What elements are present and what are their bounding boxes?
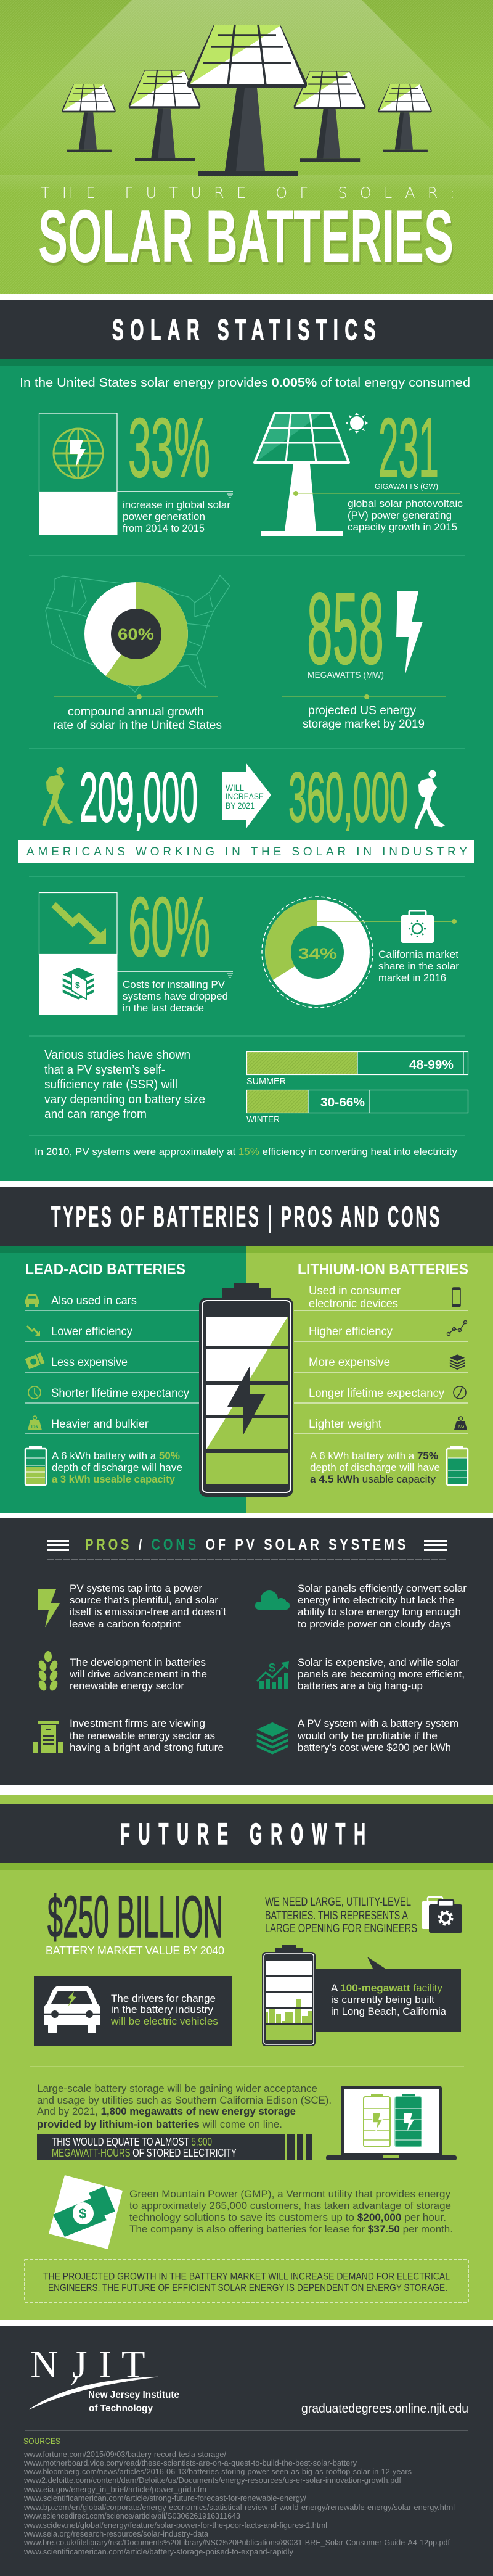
sources: www.bre.co.uk/filelibrary/nsc/Documents%20Library/NSC%20Publications/88031-BRE_Solar-Consumer-Guide-A4-12pp.pdf <box>23 2538 450 2547</box>
callout: long beach facility: A 100-megawatt facility <box>331 1982 443 1994</box>
stat: 858 megawatts <box>282 572 446 731</box>
icon: clock <box>454 1386 466 1399</box>
banner <box>18 840 474 863</box>
icon: falling arrow box: $ <box>75 980 80 990</box>
sources: www.scientificamerican.com/article/strong-future-forecast-for-renewable-energy/ <box>23 2493 306 2503</box>
text: depth of discharge will have <box>310 1462 440 1473</box>
sources <box>23 2436 455 2556</box>
stat: 33 percent <box>39 401 233 535</box>
con: storage: ability to store energy long enough <box>298 1606 461 1618</box>
pro: investment: the renewable energy sector as <box>70 1730 215 1742</box>
text: green mountain power: to approximately 265,000 customers, has taken advantage of storage <box>129 2200 451 2212</box>
stat: california market share <box>262 897 459 1008</box>
text: California market <box>378 949 458 960</box>
text <box>123 979 228 1014</box>
stat: 60 percent growth map donut <box>46 575 230 732</box>
pro: development: renewable energy sector <box>70 1680 184 1692</box>
pro: investment: Investment firms are viewing <box>70 1718 205 1729</box>
callout: long beach facility: is currently being built <box>331 1994 434 2006</box>
text <box>53 706 222 732</box>
text: engineers opening: BATTERIES. THIS REPRESENTS A <box>265 1909 408 1922</box>
con: expensive: batteries are a big hang-up <box>298 1680 423 1692</box>
icon: falling arrow box <box>39 893 117 1015</box>
chart: donut: 34% <box>298 945 337 963</box>
arrow <box>222 763 271 829</box>
icon: car <box>25 1295 39 1307</box>
icon: solar panel <box>255 413 349 536</box>
text: (PV) power generating <box>348 509 452 521</box>
text: engineers opening: WE NEED LARGE, UTILITY-LEVEL <box>265 1896 411 1909</box>
icon: sun <box>346 413 368 434</box>
con: expensive: panels are becoming more efficient, <box>298 1668 465 1680</box>
text: depth of discharge will have <box>52 1462 182 1473</box>
callout: conclusion <box>25 2260 468 2302</box>
icon: wheat <box>37 1651 59 1692</box>
text: efficiency note: In 2010, PV systems were approximately at 15% efficiency in converting heat into electricity <box>35 1146 457 1158</box>
text: large-scale storage: and usage by utilities such as Southern California Edison (SCE). <box>37 2094 332 2106</box>
sources: www.scientificamerican.com/article/battery-storage-poised-to-expand-rapidly <box>23 2547 293 2556</box>
list: Used in consumer <box>309 1285 401 1298</box>
stat: 250 billion: BATTERY MARKET VALUE BY 2040 <box>46 1944 224 1957</box>
list: Heavier and bulkier <box>51 1418 149 1431</box>
icon: bolt <box>38 1589 60 1627</box>
con: expensive: Solar is expensive, and while solar <box>298 1656 459 1668</box>
icon: car <box>44 1986 100 2033</box>
pro: emission free: itself is emission-free and doesn’t <box>70 1606 226 1618</box>
icon: weight <box>28 1416 42 1430</box>
con: expensive <box>257 1656 465 1692</box>
text: capacity growth in 2015 <box>348 521 457 533</box>
panel: lead-acid batteries <box>25 1261 199 1485</box>
pro: development: The development in batteries <box>70 1656 206 1668</box>
list: Less expensive <box>51 1356 128 1369</box>
icon: weight: KG <box>458 1425 465 1429</box>
text: projected US energy <box>308 704 416 717</box>
stat: 60 percent cost drop <box>39 880 233 1015</box>
chart: summer bar: SUMMER <box>246 1076 286 1087</box>
list: electronic devices <box>309 1298 398 1311</box>
pro: investment: having a bright and strong future <box>70 1742 224 1753</box>
pro: emission free: leave a carbon footprint <box>70 1618 181 1630</box>
text: engineers opening <box>265 1896 417 1935</box>
icon: money <box>49 2175 123 2249</box>
text: large-scale storage: provided by lithium-ion batteries will come on line. <box>37 2118 282 2130</box>
text: self sufficiency rate: sufficiency rate (SSR) will <box>44 1078 177 1092</box>
chart: summer bar <box>246 1051 468 1087</box>
list: Shorter lifetime expectancy <box>51 1387 189 1400</box>
icon: bolt <box>396 591 423 675</box>
text: A 6 kWh battery with a 75% <box>310 1450 438 1462</box>
callout: electric vehicles: in the battery industry <box>111 2004 214 2015</box>
text: self sufficiency rate: and can range from <box>44 1108 147 1121</box>
text: storage market by 2019 <box>303 718 425 731</box>
pro: emission free: source that’s plentiful, and solar <box>70 1594 218 1606</box>
pro: emission free <box>38 1582 226 1630</box>
logo: njit: of Technology <box>89 2403 153 2414</box>
list: Higher efficiency <box>309 1325 393 1338</box>
icon: cloud <box>255 1590 290 1610</box>
con: profitability <box>257 1718 458 1755</box>
icon: weight <box>454 1417 467 1430</box>
icon: briefcases with gear <box>422 1897 462 1933</box>
illustration: central battery <box>199 1283 293 1497</box>
stat: 60 percent cost drop: 60% <box>128 880 210 974</box>
text: a 4.5 kWh usable capacity <box>310 1473 436 1485</box>
icon: money stack <box>257 1722 288 1755</box>
icon: building <box>33 1721 63 1753</box>
icon: cash <box>25 1352 44 1369</box>
teal battery <box>395 2094 422 2147</box>
chart: summer bar: 48-99% <box>409 1058 454 1072</box>
logo: njit: NJIT <box>30 2343 145 2386</box>
website url: graduatedegrees.online.njit.edu <box>301 2402 468 2416</box>
icon: laptop with batteries <box>326 2086 457 2160</box>
hero background <box>0 0 493 294</box>
icon: stack <box>450 1354 465 1370</box>
icon: briefcase with sun <box>401 911 434 943</box>
text: self sufficiency rate: vary depending on battery size <box>44 1093 205 1106</box>
text: in the last decade <box>123 1002 204 1014</box>
con: storage <box>255 1582 467 1630</box>
text: rate of solar in the United States <box>53 719 222 732</box>
stat: 858 megawatts: MEGAWATTS (MW) <box>308 670 384 680</box>
sources: www.eia.gov/energy_in_brief/article/power_grid.cfm <box>23 2485 206 2494</box>
list: Longer lifetime expectancy <box>309 1387 444 1400</box>
stat: 231 gigawatts: GIGAWATTS (GW) <box>375 482 438 491</box>
con: profitability: would only be profitable if the <box>297 1730 438 1742</box>
logo: njit: New Jersey Institute <box>88 2390 179 2400</box>
stat: 231 gigawatts <box>255 401 463 536</box>
con: storage: Solar panels efficiently convert solar <box>298 1582 467 1594</box>
arrow: INCREASE <box>226 791 264 801</box>
icon: walker white <box>414 770 445 829</box>
con: storage: to provide power on cloudy days <box>298 1618 451 1630</box>
arrow: BY 2021 <box>226 800 255 810</box>
list <box>51 1294 189 1431</box>
list: Lighter weight <box>309 1418 382 1431</box>
callout: long beach facility: in Long Beach, California <box>331 2006 447 2017</box>
callout: electric vehicles: will be electric vehicles <box>110 2015 218 2027</box>
text <box>123 499 230 534</box>
text: green mountain power: Green Mountain Power (GMP), a Vermont utility that provides energy <box>129 2188 451 2200</box>
icon: graph <box>447 1321 467 1336</box>
text <box>310 1450 440 1485</box>
sources: www.seia.org/research-resources/solar-industry-data <box>23 2529 209 2538</box>
green battery <box>364 2094 390 2147</box>
panel: lead-acid batteries: LEAD-ACID BATTERIES <box>25 1261 185 1278</box>
text: $250 BILLION <box>47 1884 223 1950</box>
text: global solar photovoltaic <box>348 498 463 509</box>
stat: solar workers <box>18 759 474 863</box>
icon: clock <box>28 1386 41 1399</box>
icon: small battery 50 <box>25 1446 46 1485</box>
text: green mountain power: technology solutions to save its customers up to $200,000 per hour. <box>129 2212 446 2223</box>
banner: stored electricity: MEGAWATT-HOURS OF STORED ELECTRICITY <box>52 2147 237 2159</box>
text: a 3 kWh useable capacity <box>52 1473 176 1485</box>
subtitle: THE FUTURE OF SOLAR: <box>41 184 455 202</box>
icon: small battery 75 <box>447 1446 468 1485</box>
solar panels illustration <box>62 25 432 176</box>
heading: pros and cons of pv solar systems: PROS / CONS OF PV SOLAR SYSTEMS <box>85 1536 409 1553</box>
text: large-scale storage: Large-scale battery storage will be gaining wider acceptance <box>37 2083 317 2094</box>
text <box>378 949 459 984</box>
list: Lower efficiency <box>51 1325 132 1338</box>
icon: city battery <box>262 1945 316 2046</box>
text: large-scale storage: And by 2021, 1,800 megawatts of new energy storage <box>37 2105 296 2117</box>
list: More expensive <box>309 1356 390 1369</box>
text: A 6 kWh battery with a 50% <box>52 1450 180 1462</box>
sources: www.sciencedirect.com/science/article/pii/S0306261916311643 <box>23 2511 240 2520</box>
sources: www.fortune.com/2015/09/03/battery-record-tesla-storage/ <box>23 2450 226 2459</box>
con: storage: energy into electricity but lack the <box>298 1594 454 1606</box>
sources: www2.deloitte.com/content/dam/Deloitte/us/Documents/energy-resources/us-er-solar-innovation-growth.pdf <box>23 2475 401 2485</box>
text: Costs for installing PV <box>123 979 226 990</box>
arrow: WILL <box>226 783 244 792</box>
text <box>303 704 425 731</box>
pro: development <box>37 1651 207 1692</box>
panel: lithium-ion batteries: LITHIUM-ION BATTERIES <box>298 1261 468 1278</box>
chart: donut: 60% <box>118 626 154 643</box>
pro: development: will drive advancement in the <box>69 1668 207 1680</box>
icon: growth chart <box>257 1661 289 1689</box>
text: engineers opening: LARGE OPENING FOR ENGINEERS <box>265 1922 417 1935</box>
text: large-scale storage <box>37 2083 332 2130</box>
chart: winter bar: WINTER <box>246 1114 280 1125</box>
intro sentence: In the United States solar energy provides 0.005% of total energy consumed <box>20 376 470 390</box>
icon: money: $ <box>79 2206 86 2221</box>
logo: njit <box>29 2343 179 2414</box>
sources: www.motherboard.vice.com/read/these-scientists-are-on-a-quest-to-build-the-best-solar-battery <box>23 2458 357 2467</box>
text: share in the solar <box>378 960 459 972</box>
con: profitability: A PV system with a battery system <box>298 1718 458 1729</box>
stat: 250 billion <box>46 1884 224 1957</box>
text: increase in global solar <box>123 499 230 511</box>
text: market in 2016 <box>378 972 446 984</box>
list <box>309 1285 444 1431</box>
sources: www.bloomberg.com/news/articles/2016-06-13/batteries-storing-power-seen-as-big-as-rooftop-solar-in-12-years <box>23 2467 412 2476</box>
sources: www.bp.com/en/global/corporate/energy-economics/statistical-review-of-world-energy/renewable-energy/solar-energy.html <box>23 2503 455 2512</box>
chart: winter bar: 30-66% <box>320 1096 365 1109</box>
text <box>52 1450 182 1485</box>
text: systems have dropped <box>123 990 228 1002</box>
heading: pros and cons of pv solar systems <box>47 1536 447 1560</box>
stat: solar workers: 209,000 <box>79 759 198 837</box>
icon: phone <box>452 1288 460 1307</box>
banner: AMERICANS WORKING IN THE SOLAR IN INDUSTRY <box>26 846 467 858</box>
panel: lithium-ion batteries <box>294 1261 468 1485</box>
icon: globe box <box>39 413 117 535</box>
text <box>348 498 463 533</box>
pro: investment <box>33 1718 224 1753</box>
stat: 858 megawatts: 858 <box>307 572 384 685</box>
sources: www.scidev.net/global/energy/feature/solar-power-for-the-poor-facts-and-figures-1.html <box>23 2520 327 2530</box>
icon: down arrow <box>27 1326 40 1336</box>
callout: electric vehicles: The drivers for change <box>111 1993 216 2004</box>
text: green mountain power <box>129 2188 453 2235</box>
icon: weight: lbs <box>31 1424 38 1430</box>
con: profitability: battery’s cost were $200 per kWh <box>298 1742 451 1753</box>
sources: SOURCES <box>23 2436 60 2446</box>
title <box>38 184 455 281</box>
pro: emission free: PV systems tap into a power <box>70 1582 202 1594</box>
banner: stored electricity: THIS WOULD EQUATE TO ALMOST 5,900 <box>52 2136 212 2148</box>
banner: stored electricity <box>37 2134 312 2160</box>
text: power generation <box>123 511 205 522</box>
list: Also used in cars <box>51 1294 137 1307</box>
callout: electric vehicles <box>34 1976 232 2046</box>
text: self sufficiency rate <box>44 1048 205 1121</box>
text: self sufficiency rate: Various studies have shown <box>44 1048 190 1062</box>
icon: walker green <box>42 767 73 826</box>
chart: donut <box>84 582 188 686</box>
text: from 2014 to 2015 <box>123 522 205 534</box>
map: united states <box>46 575 230 692</box>
text: green mountain power: The company is also offering batteries for lease for $37.50 per month. <box>129 2223 453 2235</box>
callout: long beach facility <box>316 1957 461 2032</box>
chart: donut <box>262 897 373 1008</box>
icon: growth chart: $ <box>269 1661 275 1675</box>
text: self sufficiency rate: that a PV system’s self- <box>44 1063 165 1077</box>
stat: 33 percent: 33% <box>128 401 210 495</box>
chart: winter bar <box>246 1090 468 1125</box>
text: compound annual growth <box>68 706 204 718</box>
